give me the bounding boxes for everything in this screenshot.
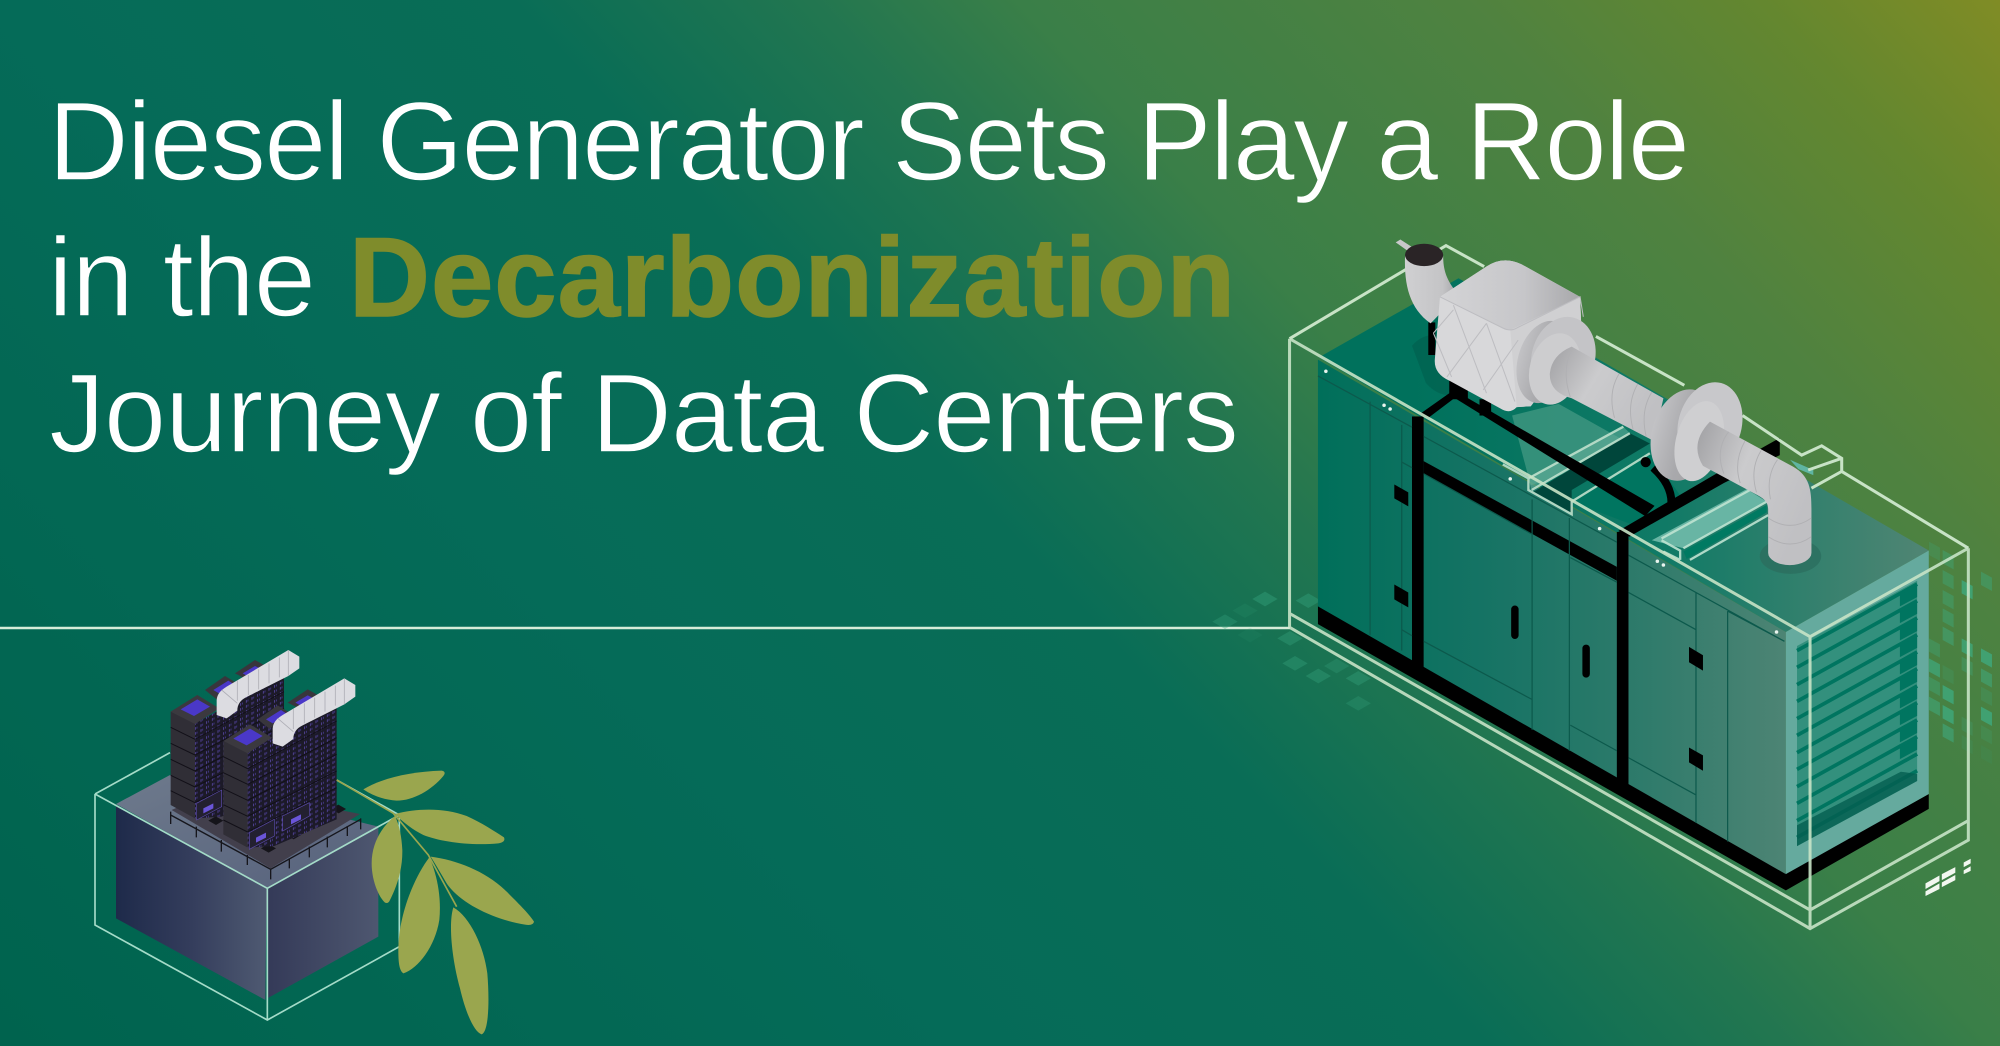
silencer shadow on roof: [1412, 335, 1466, 395]
title line 1: Diesel Generator Sets Play a Role: [48, 79, 1690, 204]
black frame: [1412, 322, 1780, 788]
title: [48, 79, 1690, 476]
wire frame back edges: [1290, 246, 1968, 548]
title line 3: Journey of Data Centers: [49, 351, 1239, 476]
exhaust elbow: [1405, 256, 1459, 323]
generator top face: [1319, 278, 1929, 632]
exhaust pipe section: [1550, 347, 1663, 441]
decorative pixels left of generator: [1212, 592, 1371, 711]
decorative pixels right of generator: [1929, 542, 1992, 764]
rack row back: [171, 660, 284, 820]
generator base: [1318, 605, 1929, 890]
elbow shadow: [1760, 538, 1821, 574]
air duct back: [217, 650, 299, 718]
exhaust opening: [1405, 244, 1443, 266]
door panel lines: [1318, 376, 1784, 842]
lighter roof section: [1512, 404, 1638, 485]
divider line: [0, 627, 1290, 629]
rack row front: [223, 689, 337, 849]
cube right face: [267, 827, 378, 998]
roof recess one: [1503, 427, 1680, 525]
door latches: [1394, 484, 1703, 771]
radiator louvers: [1797, 581, 1917, 846]
platform: [171, 787, 361, 879]
logo mark: [1926, 859, 1971, 896]
rivets: [1324, 370, 1778, 634]
cube left face: [116, 805, 267, 1000]
data center on cube with leaves: [95, 650, 534, 1034]
flange two: [1641, 375, 1752, 488]
exhaust pipe elbow: [1697, 422, 1811, 565]
radiator end face: [1786, 551, 1929, 874]
title line 2: [48, 215, 1235, 340]
silencer box: [1433, 260, 1583, 411]
air duct front: [273, 678, 355, 747]
olive branch: [337, 771, 534, 1034]
highlighted word: Decarbonization: [349, 215, 1235, 340]
title line 2: in the: [48, 215, 316, 340]
hose: [1653, 468, 1671, 505]
wire frame front edges: [1290, 339, 1968, 929]
exhaust stub: [1396, 240, 1412, 252]
cube top: [116, 775, 378, 888]
wire box front: [95, 794, 399, 1020]
roof recess two: [1652, 460, 1813, 560]
flange one: [1508, 310, 1604, 411]
wire box back: [95, 753, 399, 1020]
diesel generator illustration: [1290, 240, 1971, 929]
generator side face: [1318, 360, 1786, 874]
